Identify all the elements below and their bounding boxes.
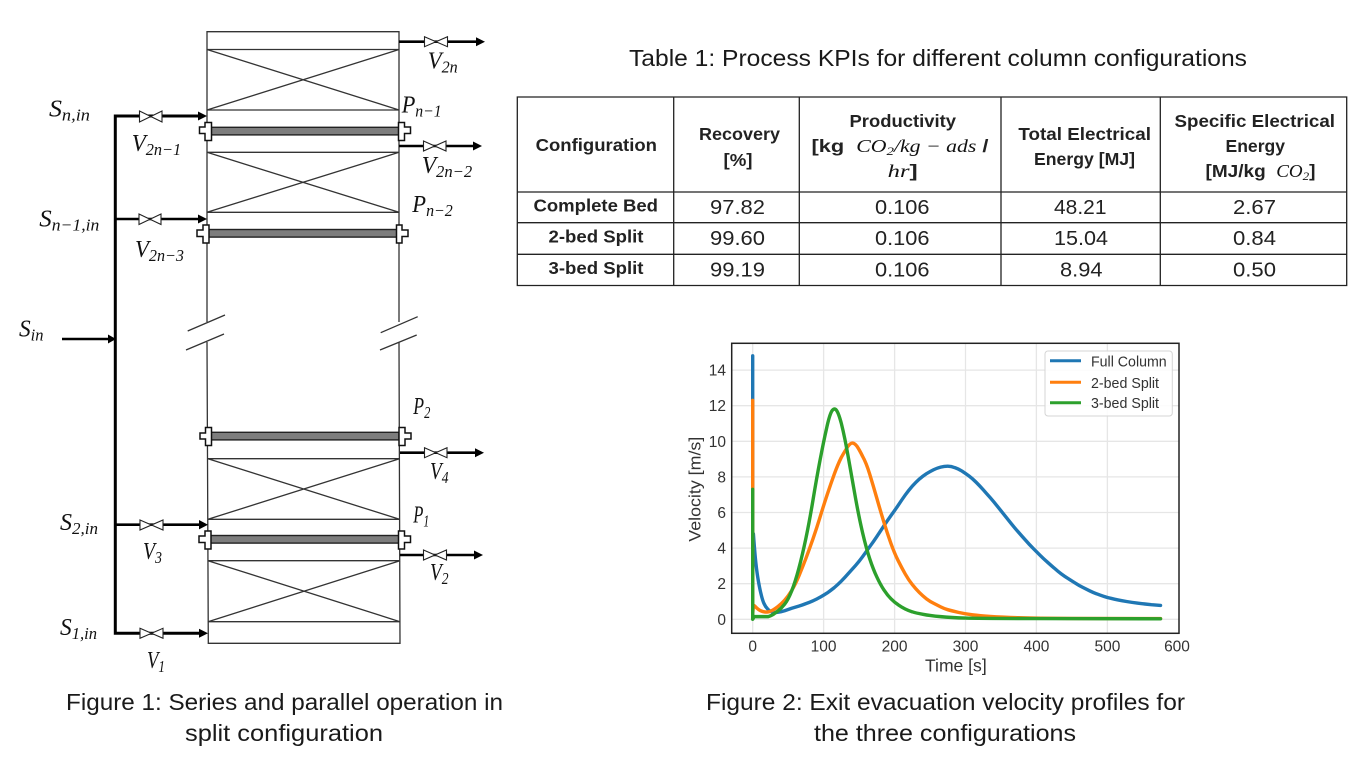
- y axis tick labels: 2: [717, 576, 726, 593]
- label S 1,in: 1,in: [72, 624, 97, 643]
- label S n-1,in: S: [39, 207, 51, 233]
- label V 1: 1: [158, 657, 165, 676]
- outlet V2 arrow with valve: [400, 550, 483, 560]
- plot frame: [732, 343, 1179, 633]
- table header row: [kg CO: [812, 136, 881, 156]
- figure 1 caption: split configuration: [185, 720, 383, 746]
- y axis tick labels: 12: [709, 398, 726, 415]
- table header row: Energy: [1226, 136, 1285, 156]
- separator tube P n-2: [197, 225, 408, 243]
- label P n-2: n−2: [426, 201, 453, 220]
- table header row: /: [981, 136, 986, 156]
- table header row: Total Electrical: [1018, 124, 1151, 144]
- separator tube P 2: [200, 428, 411, 446]
- column break marks: [186, 315, 418, 350]
- feed branch S n,in with valve: [140, 111, 207, 122]
- x axis tick labels: 500: [1094, 639, 1121, 656]
- table header row: [%]: [724, 150, 752, 170]
- label P n-1: P: [402, 93, 416, 119]
- outlet V2n arrow with valve: [399, 37, 485, 47]
- row: complete bed: 0.106: [875, 196, 930, 219]
- row: 3-bed split: 0.106: [875, 259, 930, 282]
- x axis tick labels: 200: [882, 639, 908, 656]
- table header row: Configuration: [536, 135, 657, 155]
- row: 3-bed split: 99.19: [710, 259, 765, 282]
- row: 3-bed split: 0.50: [1233, 259, 1276, 282]
- row: 3-bed split: 8.94: [1060, 259, 1102, 282]
- label S 1,in: S: [60, 615, 72, 641]
- curve: full column: [753, 356, 1161, 612]
- row: 2-bed split: 15.04: [1054, 227, 1108, 250]
- table header row: Productivity: [850, 111, 956, 131]
- table header row: Energy [MJ]: [1034, 149, 1135, 169]
- row: 2-bed split: 2-bed Split: [548, 226, 644, 246]
- y axis tick labels: 6: [717, 505, 726, 522]
- row: 2-bed split: 0.106: [875, 227, 930, 250]
- table title: Table 1: Process KPIs for different column configurations: [629, 45, 1247, 71]
- row: complete bed: 48.21: [1054, 196, 1106, 219]
- curves: [753, 356, 1161, 619]
- adsorbent bed 2: [208, 459, 400, 519]
- label V 2n-2: 2n−2: [436, 162, 473, 181]
- table header row: ]: [1309, 161, 1316, 181]
- x axis tick labels: 600: [1164, 639, 1190, 656]
- row: complete bed: Complete Bed: [534, 196, 658, 216]
- table header row: 2: [887, 144, 894, 158]
- table header row: [MJ/kg CO: [1206, 161, 1301, 181]
- table header row: [536, 111, 1335, 183]
- label V 2: 2: [442, 569, 449, 588]
- column shell: [207, 32, 400, 643]
- feed branch S 1,in with valve: [140, 628, 208, 638]
- label S in: S: [19, 317, 31, 343]
- label S n,in: S: [49, 97, 61, 123]
- label S n-1,in: n−1,in: [52, 216, 99, 235]
- figure 2 caption: Figure 2: Exit evacuation velocity profiles for: [706, 689, 1185, 715]
- row: 3-bed split: 3-bed Split: [548, 258, 644, 278]
- figure 2 caption: [706, 689, 1185, 746]
- row: 2-bed split: 0.84: [1233, 227, 1276, 250]
- curve: 2-bed split: [753, 400, 1161, 619]
- table grid: [517, 97, 1347, 286]
- label V 1: V: [147, 648, 162, 674]
- legend: [1045, 351, 1172, 416]
- y axis tick labels: 14: [709, 363, 726, 380]
- x axis tick labels: 0: [748, 639, 757, 656]
- label V 3: 3: [154, 548, 162, 567]
- feed branch S n-1,in with valve: [115, 214, 207, 224]
- label S n,in: n,in: [62, 106, 90, 125]
- table header row: /kg − ads: [893, 136, 977, 156]
- label P 2: 2: [424, 403, 431, 422]
- row: 3-bed split: [548, 258, 1276, 282]
- label V 2: V: [430, 560, 445, 586]
- label S 2,in: 2,in: [72, 519, 98, 538]
- label P 1: P: [413, 503, 428, 529]
- y axis tick labels: 10: [709, 434, 726, 451]
- table header row: Specific Electrical: [1174, 111, 1335, 131]
- adsorbent bed 1: [208, 561, 400, 622]
- label V 4: 4: [442, 468, 449, 487]
- table header row: 2: [1303, 169, 1309, 183]
- row: complete bed: 2.67: [1233, 196, 1276, 219]
- row: 2-bed split: [548, 226, 1276, 250]
- figure 1 caption: [66, 689, 503, 746]
- row: 2-bed split: 99.60: [710, 227, 765, 250]
- outlet V4 arrow with valve: [400, 448, 484, 458]
- grid lines: [732, 344, 1179, 633]
- legend: 3-bed Split: [1091, 396, 1159, 412]
- feed header pipe: [115, 116, 199, 633]
- table header row: Recovery: [699, 124, 780, 144]
- label V 2n-1: 2n−1: [146, 140, 181, 159]
- label P 1: 1: [423, 512, 429, 531]
- legend: Full Column: [1091, 355, 1167, 371]
- label S in: in: [31, 326, 44, 345]
- label V 2n: 2n: [442, 57, 458, 76]
- y axis tick labels: [709, 363, 726, 629]
- y axis title: Velocity [m/s]: [686, 437, 704, 542]
- label S 2,in: S: [60, 510, 72, 536]
- label V 2n-3: 2n−3: [149, 246, 184, 265]
- feed branch S 2,in with valve: [115, 520, 208, 530]
- figure 1 caption: Figure 1: Series and parallel operation in: [66, 689, 503, 715]
- label V 3: V: [143, 539, 158, 565]
- x axis tick labels: 100: [811, 639, 837, 656]
- outlet V2n-2 arrow with valve: [399, 141, 482, 151]
- line chart: exit evacuation velocity: [686, 343, 1190, 676]
- label V 2n-3: V: [135, 237, 150, 263]
- x axis tick labels: [748, 639, 1190, 656]
- y axis tick labels: 4: [717, 541, 726, 558]
- y axis tick labels: 8: [717, 469, 726, 486]
- panel: KPI table: [517, 97, 1347, 286]
- adsorbent bed n-1: [207, 152, 399, 212]
- label V 4: V: [430, 459, 445, 485]
- adsorbent bed n: [207, 50, 399, 110]
- table header row: hr ]: [888, 161, 918, 181]
- x axis title: Time [s]: [925, 656, 987, 676]
- label P 2: P: [413, 394, 428, 420]
- x axis tick labels: 400: [1023, 639, 1050, 656]
- row: complete bed: [534, 196, 1276, 219]
- label V 2n-1: V: [132, 131, 146, 157]
- separator tube P 1: [199, 531, 410, 549]
- label V 2n: V: [428, 48, 442, 74]
- legend: 2-bed Split: [1091, 376, 1159, 392]
- feed inlet arrow: [62, 334, 116, 344]
- label P n-1: n−1: [415, 102, 442, 121]
- separator tube P n-1: [200, 122, 410, 140]
- row: complete bed: 97.82: [710, 196, 765, 219]
- curve: 3-bed split: [753, 409, 1161, 619]
- panel: process flow diagram: [19, 32, 485, 676]
- label P n-2: P: [412, 192, 427, 218]
- figure 2 caption: the three configurations: [814, 720, 1076, 746]
- y axis tick labels: 0: [717, 612, 726, 629]
- x axis tick labels: 300: [953, 639, 979, 656]
- label V 2n-2: V: [422, 153, 436, 179]
